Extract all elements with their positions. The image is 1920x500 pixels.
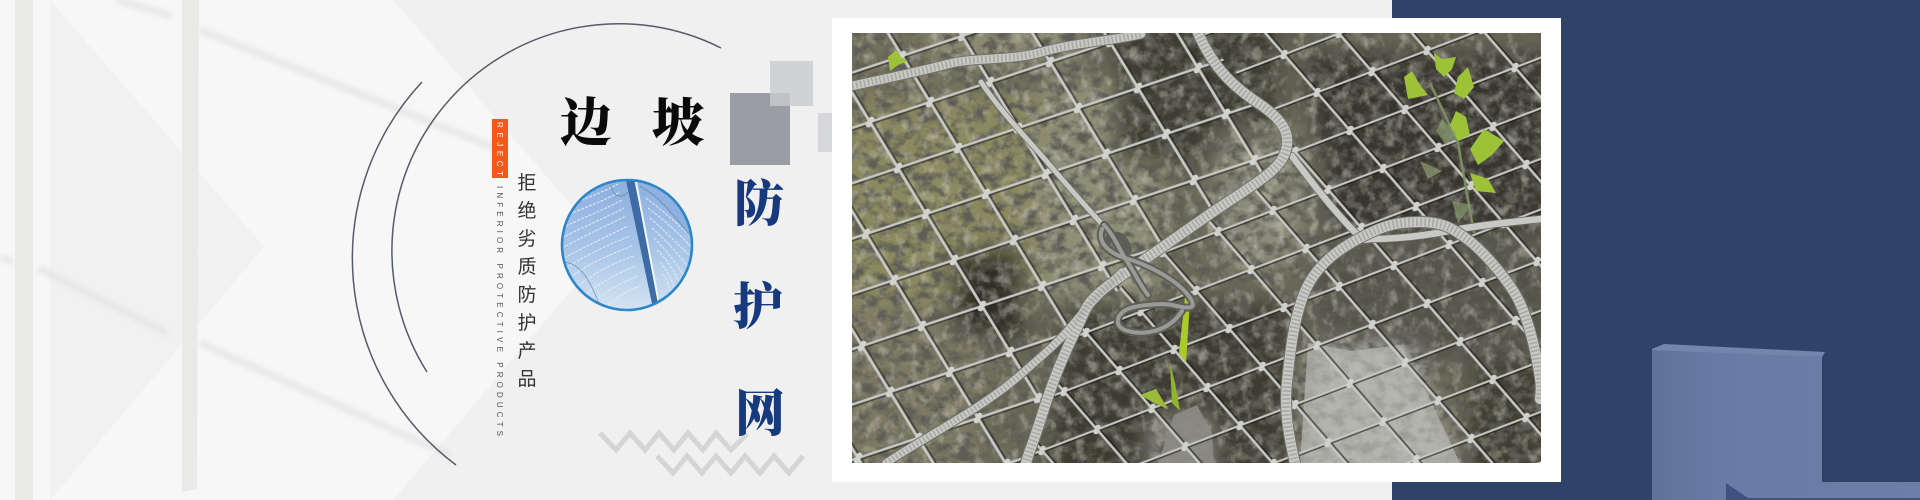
vertical Chinese slogan: 护 — [517, 312, 537, 334]
pale boulder — [1300, 343, 1460, 463]
title: 防护网: 护 — [733, 279, 783, 335]
rock texture — [852, 33, 1541, 463]
vertical English text: INFERIOR PROTECTIVE PRODUCTS — [495, 186, 504, 436]
title: 边坡 — [560, 95, 704, 153]
zigzag decoration — [600, 433, 803, 473]
vertical Chinese slogan: 质 — [517, 256, 537, 278]
cable knot — [1101, 225, 1193, 333]
orange tag: REJECT: REJECT — [495, 122, 504, 176]
title: 防护网: 防 — [734, 176, 784, 232]
vertical Chinese slogan — [517, 172, 537, 390]
steel cables — [852, 33, 1541, 463]
circular photo: protective net — [562, 180, 694, 310]
vertical Chinese slogan: 劣 — [517, 228, 537, 250]
vertical Chinese slogan: 绝 — [517, 200, 537, 222]
title: 防护网 — [733, 176, 785, 442]
wire mesh — [852, 33, 1280, 463]
vertical Chinese slogan: 防 — [517, 284, 537, 306]
blue 3D block — [1652, 344, 1920, 500]
title: 防护网: 网 — [735, 386, 785, 442]
green plants — [888, 50, 1504, 411]
vertical Chinese slogan: 品 — [517, 369, 537, 390]
white photo frame — [832, 18, 1561, 482]
vertical Chinese slogan: 拒 — [517, 172, 537, 194]
decorative squares — [730, 61, 832, 165]
arc lines — [352, 24, 721, 465]
title: 边坡: 边 — [560, 95, 612, 153]
navy panel — [1392, 0, 1920, 500]
orange tag: REJECT — [492, 119, 508, 178]
photo: slope mesh on rock — [852, 33, 1541, 463]
title: 边坡: 坡 — [652, 96, 704, 153]
vertical Chinese slogan: 产 — [517, 340, 537, 362]
rock base — [852, 33, 1541, 463]
